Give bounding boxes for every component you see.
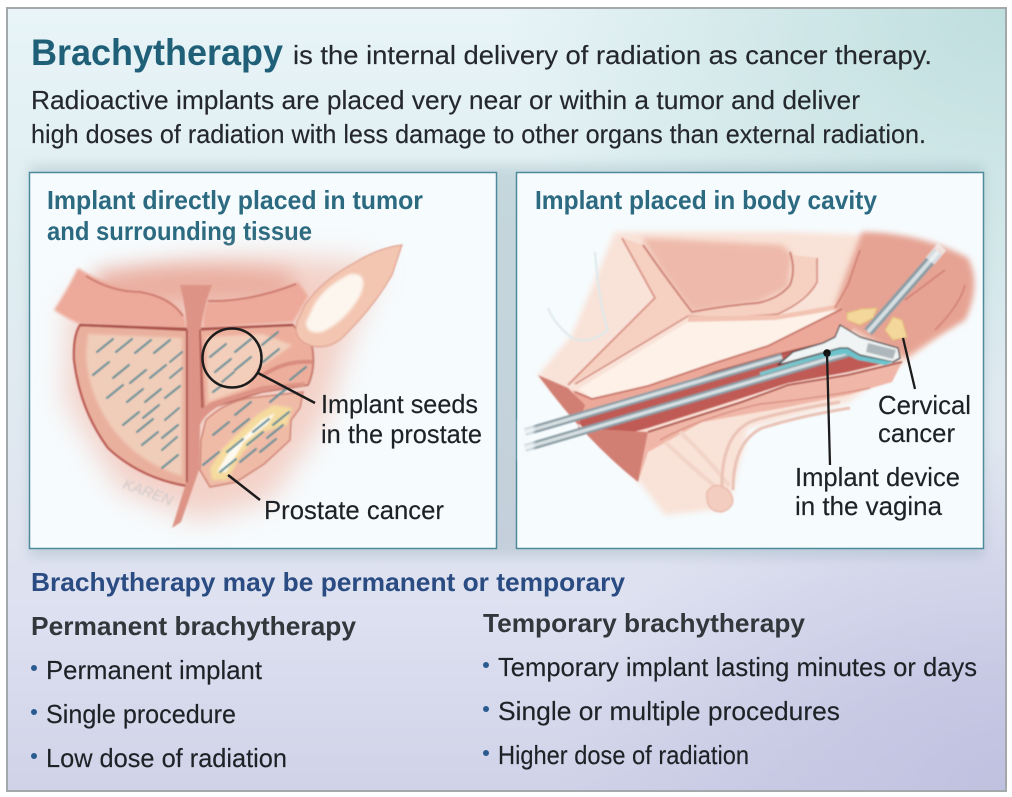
lower wall bbox=[638, 362, 902, 482]
title: Brachytherapy bbox=[31, 32, 283, 73]
applicator rods bbox=[525, 357, 782, 432]
panel heading: implant in tumor: and surrounding tissue bbox=[47, 216, 312, 246]
leader line: cervical cancer bbox=[903, 338, 915, 389]
list: permanent brachytherapy bbox=[31, 611, 357, 773]
rectum bbox=[665, 432, 729, 492]
intro text bbox=[31, 85, 926, 149]
list: permanent brachytherapy: Permanent brachytherapy bbox=[31, 611, 357, 641]
upper right band bbox=[203, 282, 308, 328]
intro text: Radioactive implants are placed very near or within a tumor and deliver bbox=[31, 85, 860, 115]
label: prostate cancer: Prostate cancer bbox=[264, 495, 444, 525]
perineal muscle bbox=[538, 375, 648, 482]
label: cervical cancer bbox=[878, 390, 971, 448]
bullet: temporary implant: Temporary implant lasting minutes or days bbox=[498, 652, 977, 682]
illustration: prostate cross-section bbox=[54, 245, 402, 528]
bullet: low dose: Low dose of radiation bbox=[46, 743, 287, 773]
panel: implant directly placed in tumor bbox=[30, 172, 496, 548]
urethra bbox=[172, 285, 305, 528]
rod fade bbox=[518, 420, 534, 460]
intro text: high doses of radiation with less damage to other organs than external radiation. bbox=[31, 119, 926, 149]
panel heading: implant in tumor: Implant directly placed in tumor bbox=[47, 185, 423, 215]
list: temporary brachytherapy: Temporary brachytherapy bbox=[483, 608, 806, 638]
prostate cancer bbox=[210, 405, 292, 480]
leader line: prostate cancer bbox=[228, 475, 260, 500]
signature: KAREN bbox=[121, 476, 175, 509]
left lobe bbox=[74, 325, 187, 486]
subheading: permanent or temporary: Brachytherapy may be permanent or temporary bbox=[31, 567, 626, 597]
seminal gland bbox=[296, 245, 402, 347]
leader line: implant device bbox=[823, 349, 831, 465]
applicator upper rod bbox=[868, 252, 938, 332]
cream space bbox=[578, 310, 838, 398]
title bbox=[31, 32, 932, 73]
right upper lobe bbox=[200, 325, 313, 410]
cavity dark bbox=[578, 340, 898, 442]
pale fascia lines bbox=[548, 252, 608, 340]
lower right lobe bbox=[200, 392, 303, 487]
vaginal upper wall bbox=[572, 308, 856, 412]
bladder interior bbox=[642, 238, 792, 312]
upper left band bbox=[54, 268, 187, 329]
list: temporary brachytherapy bbox=[483, 608, 977, 770]
panel heading: body cavity: Implant placed in body cavity bbox=[535, 185, 877, 215]
bullet: single or multiple: Single or multiple procedures bbox=[498, 696, 840, 726]
label: cervical cancer: cancer bbox=[878, 418, 955, 448]
label: implant seeds: in the prostate bbox=[321, 419, 482, 449]
bladder wall bbox=[568, 238, 817, 385]
uterus muscle bbox=[835, 232, 974, 358]
icon: implant seeds bbox=[93, 332, 306, 472]
label: implant device bbox=[795, 462, 960, 521]
bullet: higher dose: Higher dose of radiation bbox=[498, 740, 749, 770]
icon: cervical tumors bbox=[847, 308, 877, 325]
band above cream space bbox=[688, 305, 842, 324]
implant head bbox=[778, 325, 900, 365]
tissue base bbox=[538, 232, 965, 515]
label: cervical cancer: Cervical bbox=[878, 390, 971, 420]
bullet: permanent implant: Permanent implant bbox=[46, 655, 263, 685]
label: implant device: Implant device bbox=[795, 462, 960, 492]
panel: implant placed in body cavity bbox=[516, 172, 984, 548]
bullet: single procedure: Single procedure bbox=[46, 699, 236, 729]
callout circle: implant seeds bbox=[202, 328, 262, 388]
label: implant seeds bbox=[321, 389, 482, 449]
illustration: pelvic cross-section bbox=[518, 232, 974, 515]
label: implant device: in the vagina bbox=[795, 491, 943, 521]
title: is the internal delivery of radiation as cancer therapy. bbox=[293, 40, 932, 70]
label: implant seeds: Implant seeds bbox=[321, 389, 478, 419]
panel heading: implant in tumor bbox=[47, 185, 423, 246]
leader line: implant seeds bbox=[258, 373, 315, 403]
